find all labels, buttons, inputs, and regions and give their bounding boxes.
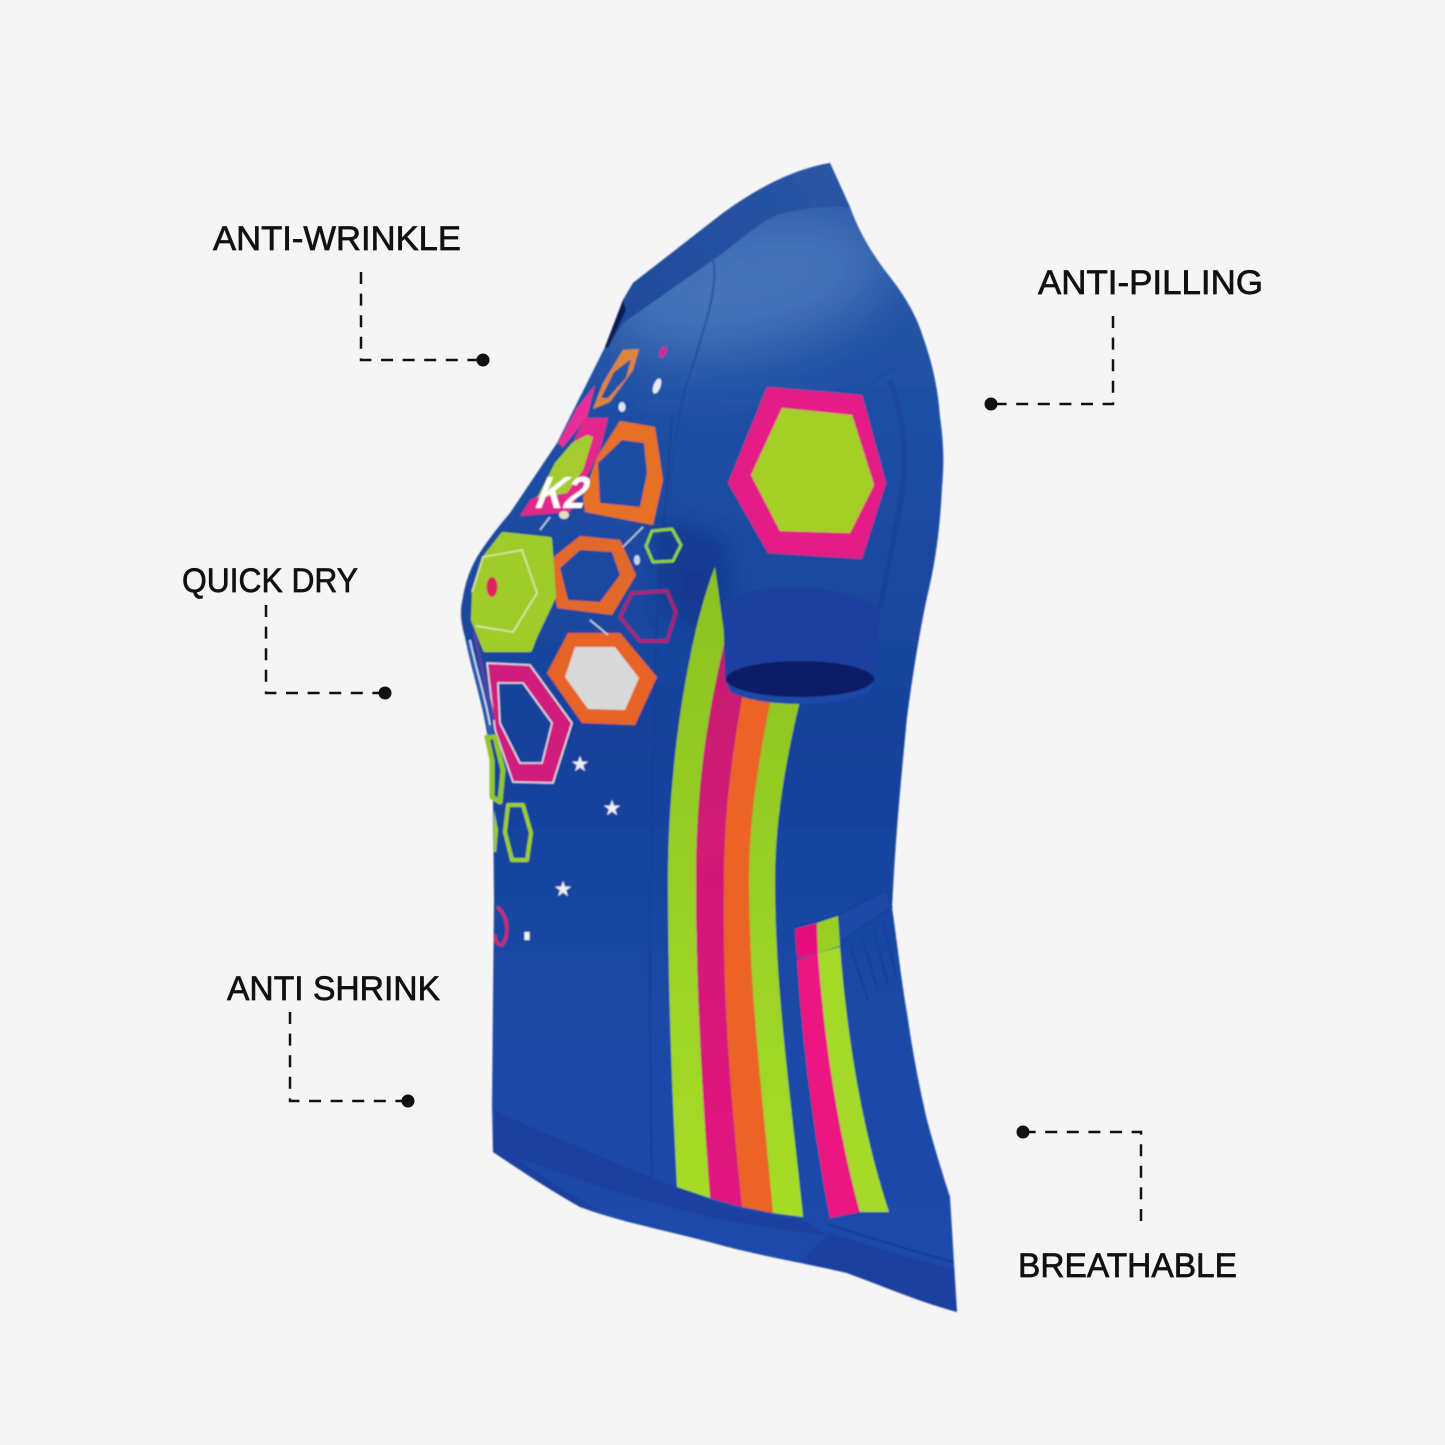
leader dot [1016, 1126, 1030, 1138]
label: quick dry: QUICK DRY [182, 562, 358, 600]
small blue-white diamond [634, 555, 640, 565]
orange hexagon with grey centre [547, 633, 657, 725]
front hem band [493, 1110, 830, 1236]
sleeve seam [671, 260, 714, 520]
pocket band lime [817, 916, 840, 953]
back hem seam [827, 1224, 953, 1262]
leader dot [378, 686, 392, 700]
callout: anti-wrinkle [213, 220, 490, 366]
maroon hexagon [620, 591, 676, 641]
bust edge lines [470, 640, 490, 725]
lime chest hexagon [537, 435, 593, 498]
leader line [1023, 1132, 1141, 1221]
bust purple edge [474, 632, 494, 720]
small pink diamond [658, 345, 668, 359]
leader dot [984, 398, 998, 410]
chest hexagon pattern [469, 345, 681, 945]
orange stripe [724, 680, 775, 1213]
big lime hexagon [473, 534, 554, 650]
collar [605, 163, 850, 350]
sleeve shadow seam [880, 380, 904, 607]
pink hexagon [487, 663, 572, 783]
leader line [361, 272, 483, 360]
label: anti-wrinkle: ANTI-WRINKLE [213, 220, 461, 258]
leader line [266, 605, 385, 693]
side seam panel [650, 415, 672, 1180]
medium orange hexagon [550, 536, 636, 615]
pocket band pink [795, 923, 818, 958]
label: anti-pilling: ANTI-PILLING [1038, 264, 1263, 302]
lower hem wedge [493, 1140, 600, 1210]
callout: quick dry [182, 562, 392, 700]
white connector lines [540, 517, 643, 635]
jersey features infographic [183, 162, 1261, 1313]
small white dot [524, 932, 530, 940]
pink edge strip [558, 385, 595, 447]
callout: anti shrink [227, 970, 440, 1108]
bust edge blue band [469, 640, 491, 735]
K2 logo: K2 [533, 467, 594, 518]
red dot [486, 577, 498, 597]
lime ring [646, 529, 681, 562]
sleeve cuff [723, 587, 880, 700]
sleeve hexagon [728, 387, 886, 559]
orange frame [547, 633, 657, 725]
small white diamond [618, 402, 626, 412]
leader line [290, 1012, 408, 1101]
label: anti shrink: ANTI SHRINK [227, 970, 440, 1008]
sleeve cuff rim [725, 678, 874, 704]
sleeve hexagon lime centre [751, 408, 874, 533]
white star: ★ [554, 878, 572, 901]
callout: anti-pilling [984, 264, 1263, 410]
lime lower hexagon [505, 805, 531, 860]
pink stripe [696, 640, 745, 1207]
orange tall hexagon [593, 349, 639, 409]
leader dot [402, 1094, 414, 1108]
leader dot [476, 354, 490, 366]
lime hexagon white outline [472, 550, 537, 632]
pocket gathers [850, 922, 896, 1000]
long lime stripe [668, 567, 725, 1198]
leader line [991, 316, 1113, 404]
sleeve opening [726, 661, 874, 697]
pink ring [495, 907, 507, 945]
pink chest hexagon [520, 418, 608, 516]
back hem tail [800, 1233, 957, 1312]
pocket pink stripe [797, 953, 860, 1218]
zip shadow [605, 300, 626, 348]
pocket lime stripe [818, 947, 889, 1212]
white star: ★ [603, 797, 621, 820]
jersey body silhouette [461, 163, 957, 1312]
pocket band [795, 890, 892, 958]
sleeve hexagon pink frame [728, 387, 886, 559]
small white diamond [651, 377, 663, 395]
second lime stripe [749, 680, 805, 1217]
label: breathable: BREATHABLE [1018, 1247, 1237, 1285]
jersey illustration [461, 163, 957, 1312]
large orange hexagon [583, 421, 663, 525]
armpit shading [655, 520, 725, 640]
white star: ★ [571, 753, 589, 776]
shoulder highlight [605, 207, 904, 388]
grey centre [565, 647, 639, 710]
callout: breathable [1016, 1126, 1237, 1285]
small pale diamond [559, 511, 569, 519]
lime sliver [494, 810, 498, 852]
lime side hexagon [487, 737, 503, 802]
